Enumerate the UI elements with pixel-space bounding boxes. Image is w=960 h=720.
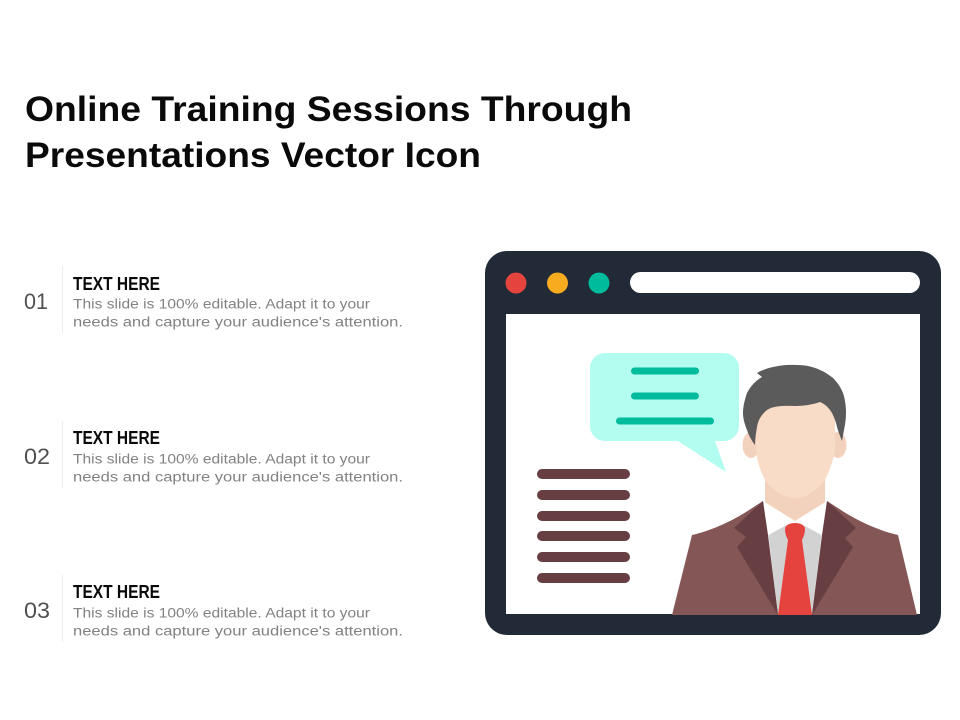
face (756, 400, 835, 498)
shirt (763, 501, 827, 615)
title: Online Training Sessions Through (25, 90, 632, 129)
item 02: TEXT HERE (73, 428, 160, 448)
address bar (630, 272, 920, 293)
item 01: needs and capture your audience's attention. (73, 314, 403, 330)
jacket (672, 501, 917, 615)
item 03: TEXT HERE (73, 582, 160, 602)
ears (742, 432, 760, 458)
lapels (734, 501, 778, 615)
item 03: 03 (24, 598, 50, 623)
icon: presentation browser window (485, 251, 941, 635)
title (25, 90, 632, 175)
title: Presentations Vector Icon (25, 136, 481, 175)
item 02: This slide is 100% editable. Adapt it to your (73, 452, 371, 466)
item 03 (24, 575, 403, 642)
presenter figure (672, 365, 917, 615)
neck (765, 470, 825, 521)
slide text lines (537, 469, 630, 583)
item 01: 01 (24, 289, 48, 314)
item 01 (24, 266, 403, 333)
hair (743, 365, 846, 445)
tie (778, 523, 812, 615)
speech bubble (590, 353, 739, 472)
window frame (485, 251, 941, 635)
item 03: needs and capture your audience's attention. (73, 624, 403, 638)
screen (506, 314, 920, 614)
window control dots (506, 272, 610, 294)
item 01: TEXT HERE (73, 274, 160, 294)
item 01: This slide is 100% editable. Adapt it to your (73, 296, 371, 312)
item 02: needs and capture your audience's attention. (73, 470, 403, 484)
item 03: This slide is 100% editable. Adapt it to your (73, 606, 371, 620)
item 02: 02 (24, 444, 50, 469)
item 02 (24, 421, 403, 488)
